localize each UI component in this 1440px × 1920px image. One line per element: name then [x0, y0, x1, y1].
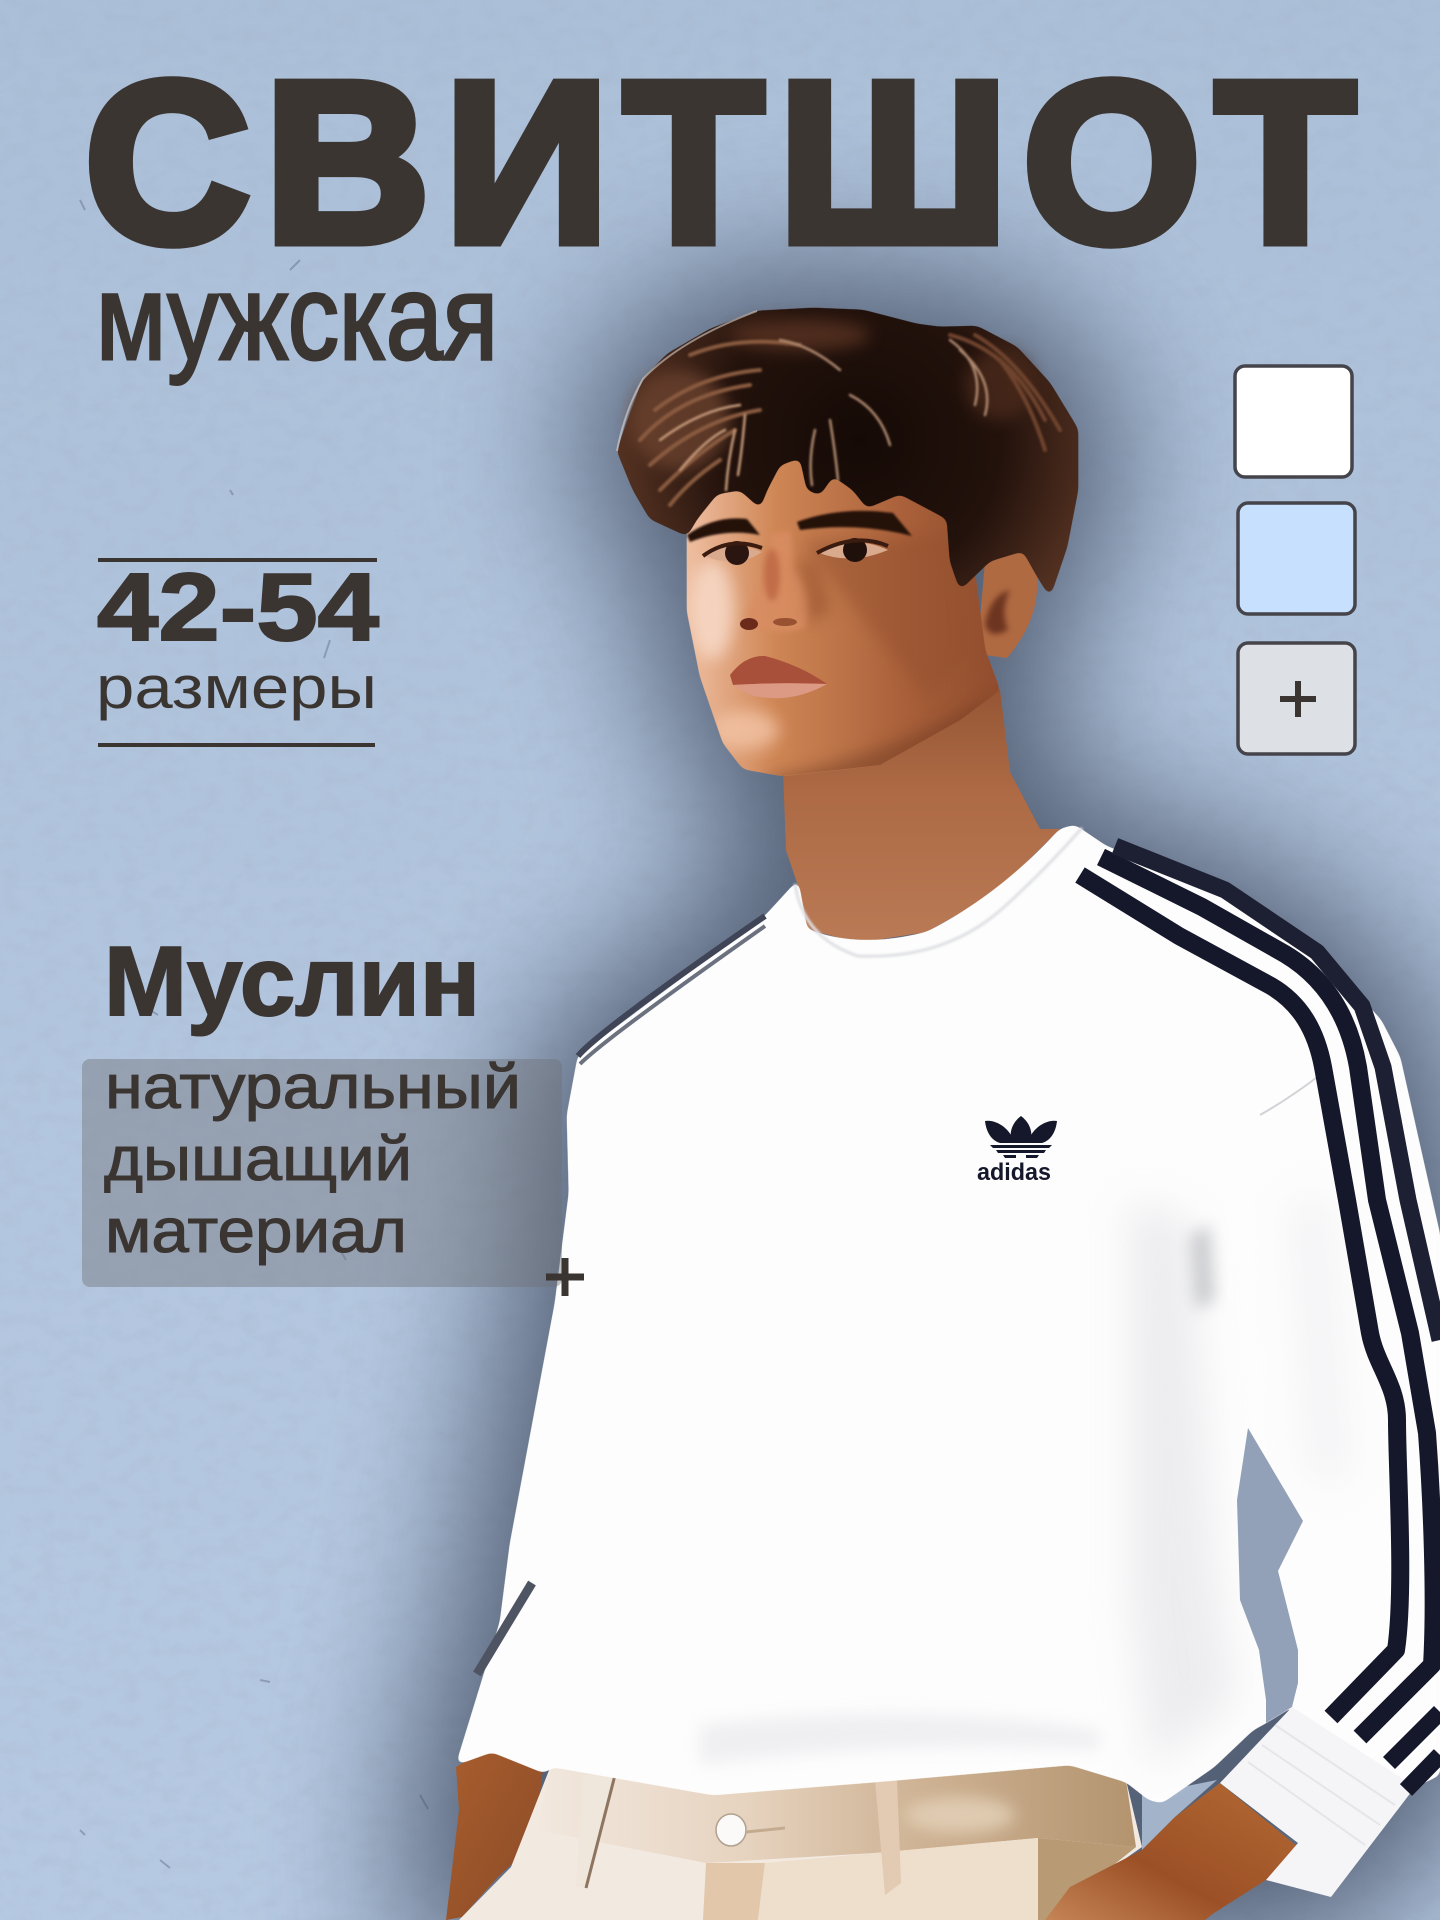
gap between torso and arm [1237, 1428, 1303, 1723]
waistband highlight [905, 1797, 1015, 1833]
size block [96, 554, 379, 747]
eyes [703, 538, 888, 565]
arm soft shading [1290, 1200, 1350, 1480]
trousers base [459, 1760, 1142, 1920]
pocket shadow [1038, 1838, 1136, 1920]
fly [703, 1863, 765, 1920]
cutout fringe [617, 311, 757, 451]
sleeve stripes right [1080, 846, 1440, 1790]
plus marker [546, 1258, 584, 1296]
person drop shadow halo [446, 308, 1440, 1920]
hair highlights [640, 335, 1060, 505]
description text: материал [105, 1197, 407, 1266]
hair soft brown tones [630, 319, 1035, 470]
collar rib [795, 828, 1082, 956]
neck [783, 640, 1060, 943]
armpit fold shading [1190, 1225, 1215, 1310]
face [687, 455, 1000, 776]
top rule [98, 558, 377, 562]
eyebrows [687, 511, 912, 542]
description text: дышащий [104, 1125, 412, 1194]
right hand on hip [1045, 1783, 1298, 1920]
ear [977, 551, 1037, 658]
sleeve seam [1260, 1075, 1320, 1115]
head [617, 308, 1078, 795]
face light and shadow [687, 537, 983, 776]
shoulder stripes left [578, 916, 765, 1064]
belt loop left [576, 1775, 615, 1888]
belt loop centre [875, 1779, 901, 1895]
swatch: light blue [1238, 503, 1355, 614]
description text: натуральный [105, 1053, 521, 1122]
brand text: adidas [977, 1159, 1051, 1186]
hair mass [617, 308, 1078, 597]
nose [740, 530, 830, 632]
trouser button [716, 1814, 746, 1846]
subtitle: мужская [96, 249, 498, 385]
material description panel [82, 1053, 584, 1296]
hair [617, 308, 1078, 597]
gap between torso and hand [1142, 1780, 1217, 1850]
bottom rule [98, 743, 375, 747]
left arm in pocket [446, 1745, 544, 1920]
adidas logo [977, 1116, 1057, 1186]
panel background [82, 1059, 562, 1287]
lower sleeve stripes left [477, 1583, 532, 1674]
colour swatches [1235, 366, 1355, 754]
title: СВИТШОТ [85, 36, 1355, 290]
swatch: more colours [1238, 643, 1355, 754]
trousers [459, 1760, 1142, 1920]
torso side shading [1130, 1200, 1235, 1770]
right trouser panel [758, 1838, 1038, 1920]
mouth [730, 656, 827, 698]
belt loop edge [586, 1775, 615, 1888]
size range: 42-54 [97, 554, 379, 661]
plus icon [1280, 681, 1316, 717]
waistband [537, 1760, 1136, 1863]
swatch: white [1235, 366, 1352, 477]
material heading: Муслин [104, 926, 480, 1036]
sweatshirt [456, 825, 1440, 1803]
size label: размеры [96, 654, 377, 721]
description text [104, 1053, 521, 1266]
hem fold shading [700, 1714, 1100, 1765]
ribbed cuff [1220, 1707, 1415, 1897]
trefoil [985, 1116, 1057, 1158]
sweatshirt body [456, 825, 1440, 1803]
